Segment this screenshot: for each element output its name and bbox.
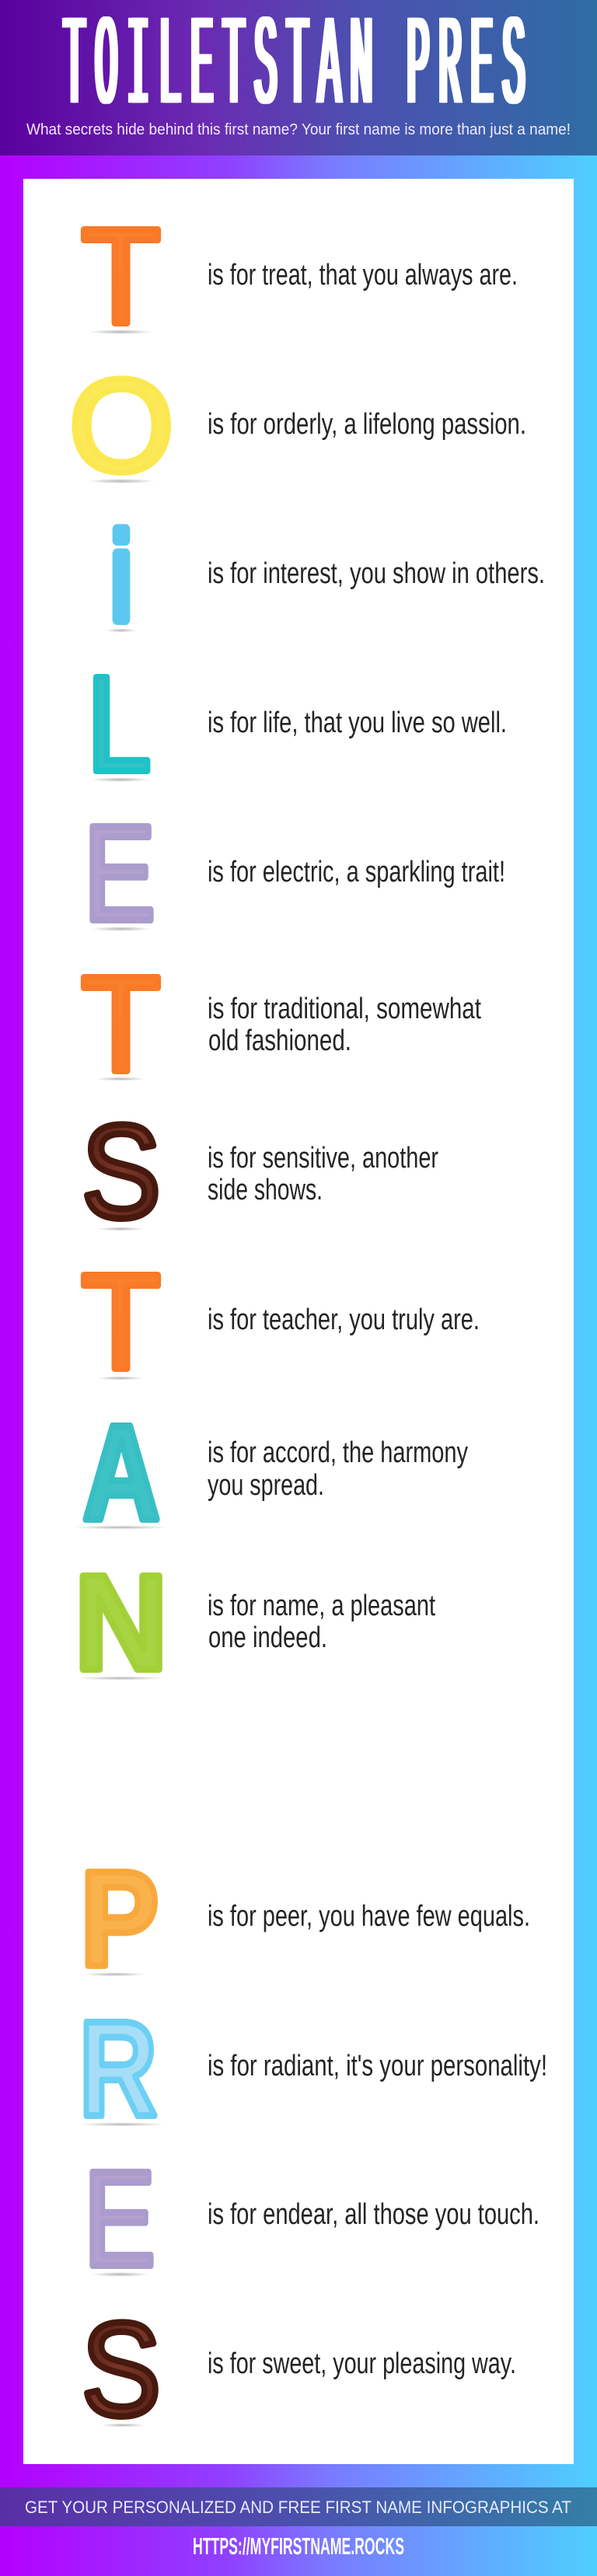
footer band bbox=[0, 2487, 597, 2526]
text: traditional bbox=[208, 993, 481, 1057]
row: S for sensitive bbox=[82, 1098, 438, 1246]
row: O for orderly bbox=[69, 352, 526, 500]
icon: letter P: P bbox=[80, 1843, 159, 1995]
row: P for peer bbox=[80, 1843, 530, 1995]
header band bbox=[0, 0, 597, 155]
icon: letter A: A bbox=[82, 1398, 160, 1548]
icon: letter E: E bbox=[83, 798, 155, 949]
icon: letter T: T bbox=[81, 1246, 161, 1398]
text: accord bbox=[208, 1436, 468, 1502]
footer url: HTTPS://MYFIRSTNAME.ROCKS bbox=[193, 2533, 404, 2560]
text: teacher: is for teacher, you truly are. bbox=[208, 1304, 480, 1336]
row: N for name bbox=[75, 1547, 435, 1698]
icon: letter O: O bbox=[69, 352, 174, 500]
row: E for electric bbox=[83, 798, 505, 949]
icon: letter N: N bbox=[75, 1547, 168, 1698]
row: L for life bbox=[86, 648, 507, 800]
row: A for accord bbox=[73, 1398, 468, 1548]
icon: letter E: E bbox=[83, 2143, 155, 2295]
icon: letter T: T bbox=[81, 201, 161, 352]
text: name: is for name, a pleasant bbox=[208, 1590, 435, 1622]
text: accord: you spread. bbox=[208, 1469, 324, 1502]
text: traditional: is for traditional, somewhat bbox=[208, 993, 481, 1025]
text: name: one indeed. bbox=[208, 1621, 327, 1654]
text: electric: is for electric, a sparkling trait! bbox=[208, 856, 505, 888]
text: sensitive: side shows. bbox=[208, 1174, 323, 1206]
row: R for radiant bbox=[79, 1993, 547, 2145]
icon: letter R: R bbox=[79, 1993, 157, 2145]
row: T for teacher bbox=[81, 1246, 480, 1398]
row: E for endear bbox=[83, 2143, 539, 2295]
icon: letter L: L bbox=[86, 648, 152, 800]
text: sensitive: is for sensitive, another bbox=[208, 1142, 438, 1175]
text: traditional: old fashioned. bbox=[208, 1024, 351, 1057]
text: sensitive bbox=[208, 1142, 438, 1206]
icon: letter T: T bbox=[81, 948, 161, 1100]
text: accord: is for accord, the harmony bbox=[208, 1436, 468, 1469]
row: I for interest bbox=[106, 507, 545, 646]
row: T for traditional bbox=[81, 948, 481, 1100]
icon: letter i: i bbox=[110, 507, 132, 646]
text: name bbox=[208, 1590, 435, 1654]
text: life: is for life, that you live so well. bbox=[208, 707, 507, 739]
row: T for treat bbox=[81, 201, 518, 352]
icon: letter S: S bbox=[82, 2295, 161, 2444]
row: S for sweet bbox=[82, 2295, 516, 2444]
icon: letter S: S bbox=[82, 1098, 161, 1246]
subtitle: What secrets hide behind this first name? Your first name is more than just a name! bbox=[26, 121, 571, 138]
footer call to action: GET YOUR PERSONALIZED AND FREE FIRST NAME INFOGRAPHICS AT bbox=[25, 2497, 571, 2517]
title: TOILETSTAN PRES bbox=[61, 0, 532, 142]
